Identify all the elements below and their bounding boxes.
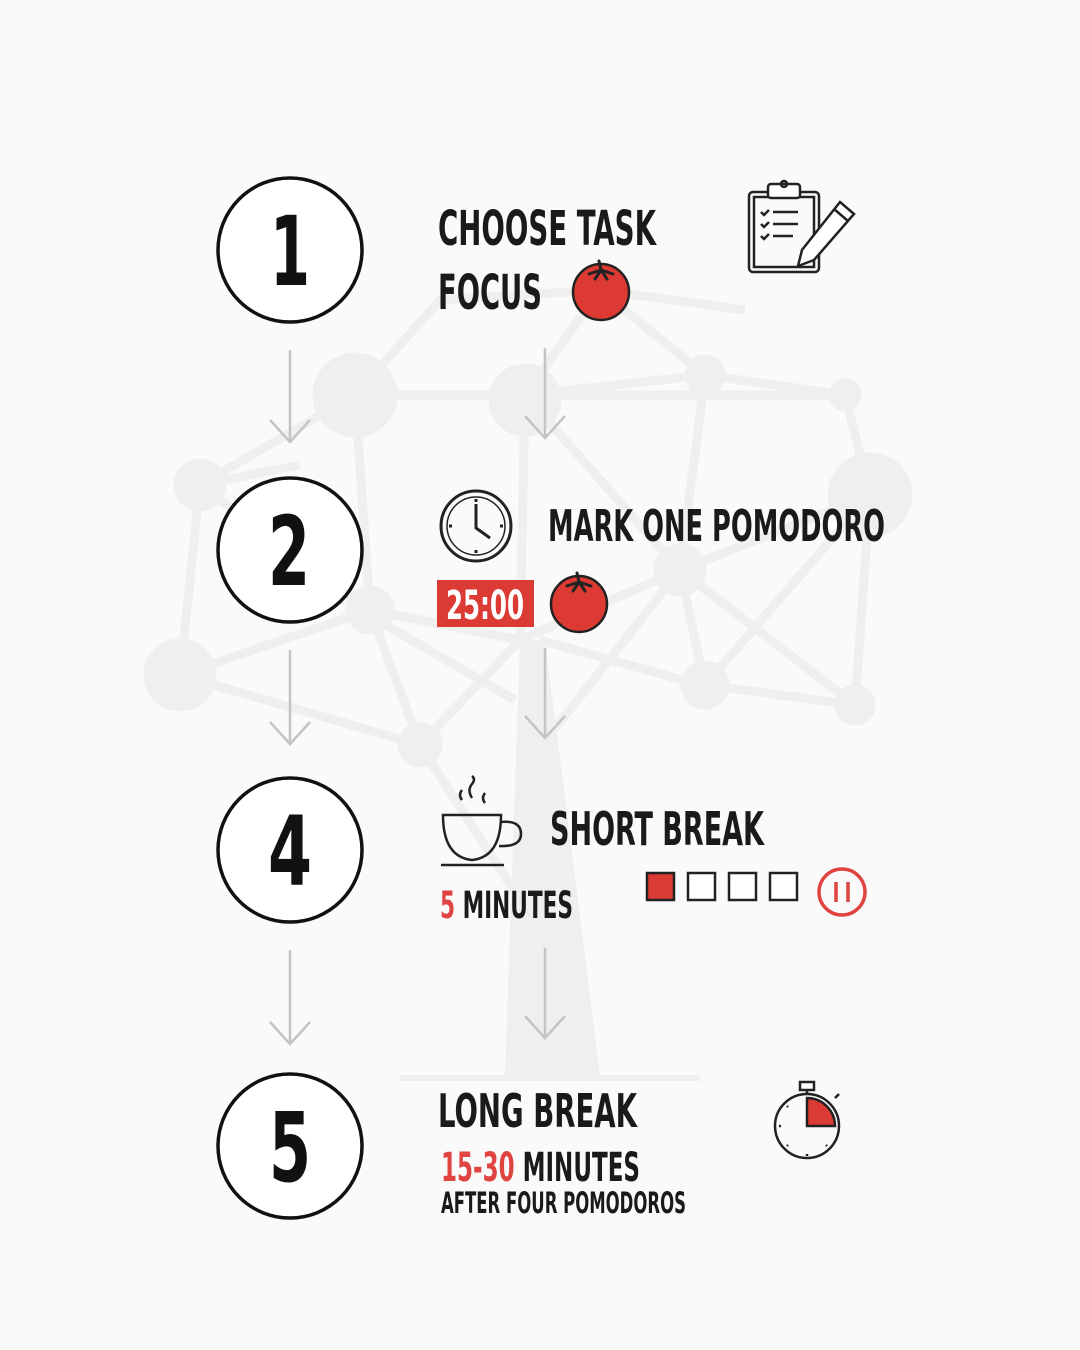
icon: tomato 1: [573, 261, 629, 320]
step 5 circle: [218, 1074, 362, 1218]
timer badge 25:00: 25:00: [446, 583, 524, 629]
icon: clock: [441, 491, 511, 561]
step 1 circle: [218, 178, 362, 322]
step 1 text: [438, 201, 657, 321]
icon: stopwatch: [775, 1082, 839, 1158]
step 4 circle: [218, 778, 362, 922]
step 1 circle: 1: [270, 196, 310, 308]
timer badge 25:00: [437, 580, 534, 629]
arrows: [270, 348, 565, 1044]
icon: coffee cup: [441, 776, 521, 865]
icon: tomato 2: [551, 573, 607, 632]
icon: pause: [819, 869, 865, 915]
step 5 circle: 5: [269, 1092, 311, 1204]
step 5 text: LONG BREAK: [438, 1084, 638, 1138]
step 5 text: [438, 1084, 686, 1220]
step 4 circle: 4: [268, 796, 312, 908]
step 2 circle: 2: [268, 496, 310, 608]
icon: clipboard: [749, 181, 854, 272]
step 5 text: AFTER FOUR POMODOROS: [441, 1186, 686, 1220]
5 minutes: 5 MINUTES: [440, 884, 573, 927]
step 2 circle: [218, 478, 362, 622]
step 2 title: MARK ONE POMODORO: [548, 501, 885, 552]
step 5 text: 15-30 MINUTES: [441, 1145, 640, 1191]
pomodoro progress boxes: [647, 873, 797, 900]
step 4 title: SHORT BREAK: [550, 802, 765, 856]
step 1 text: FOCUS: [438, 265, 542, 321]
step 1 text: CHOOSE TASK: [438, 201, 657, 257]
background tree network: [148, 280, 908, 1078]
